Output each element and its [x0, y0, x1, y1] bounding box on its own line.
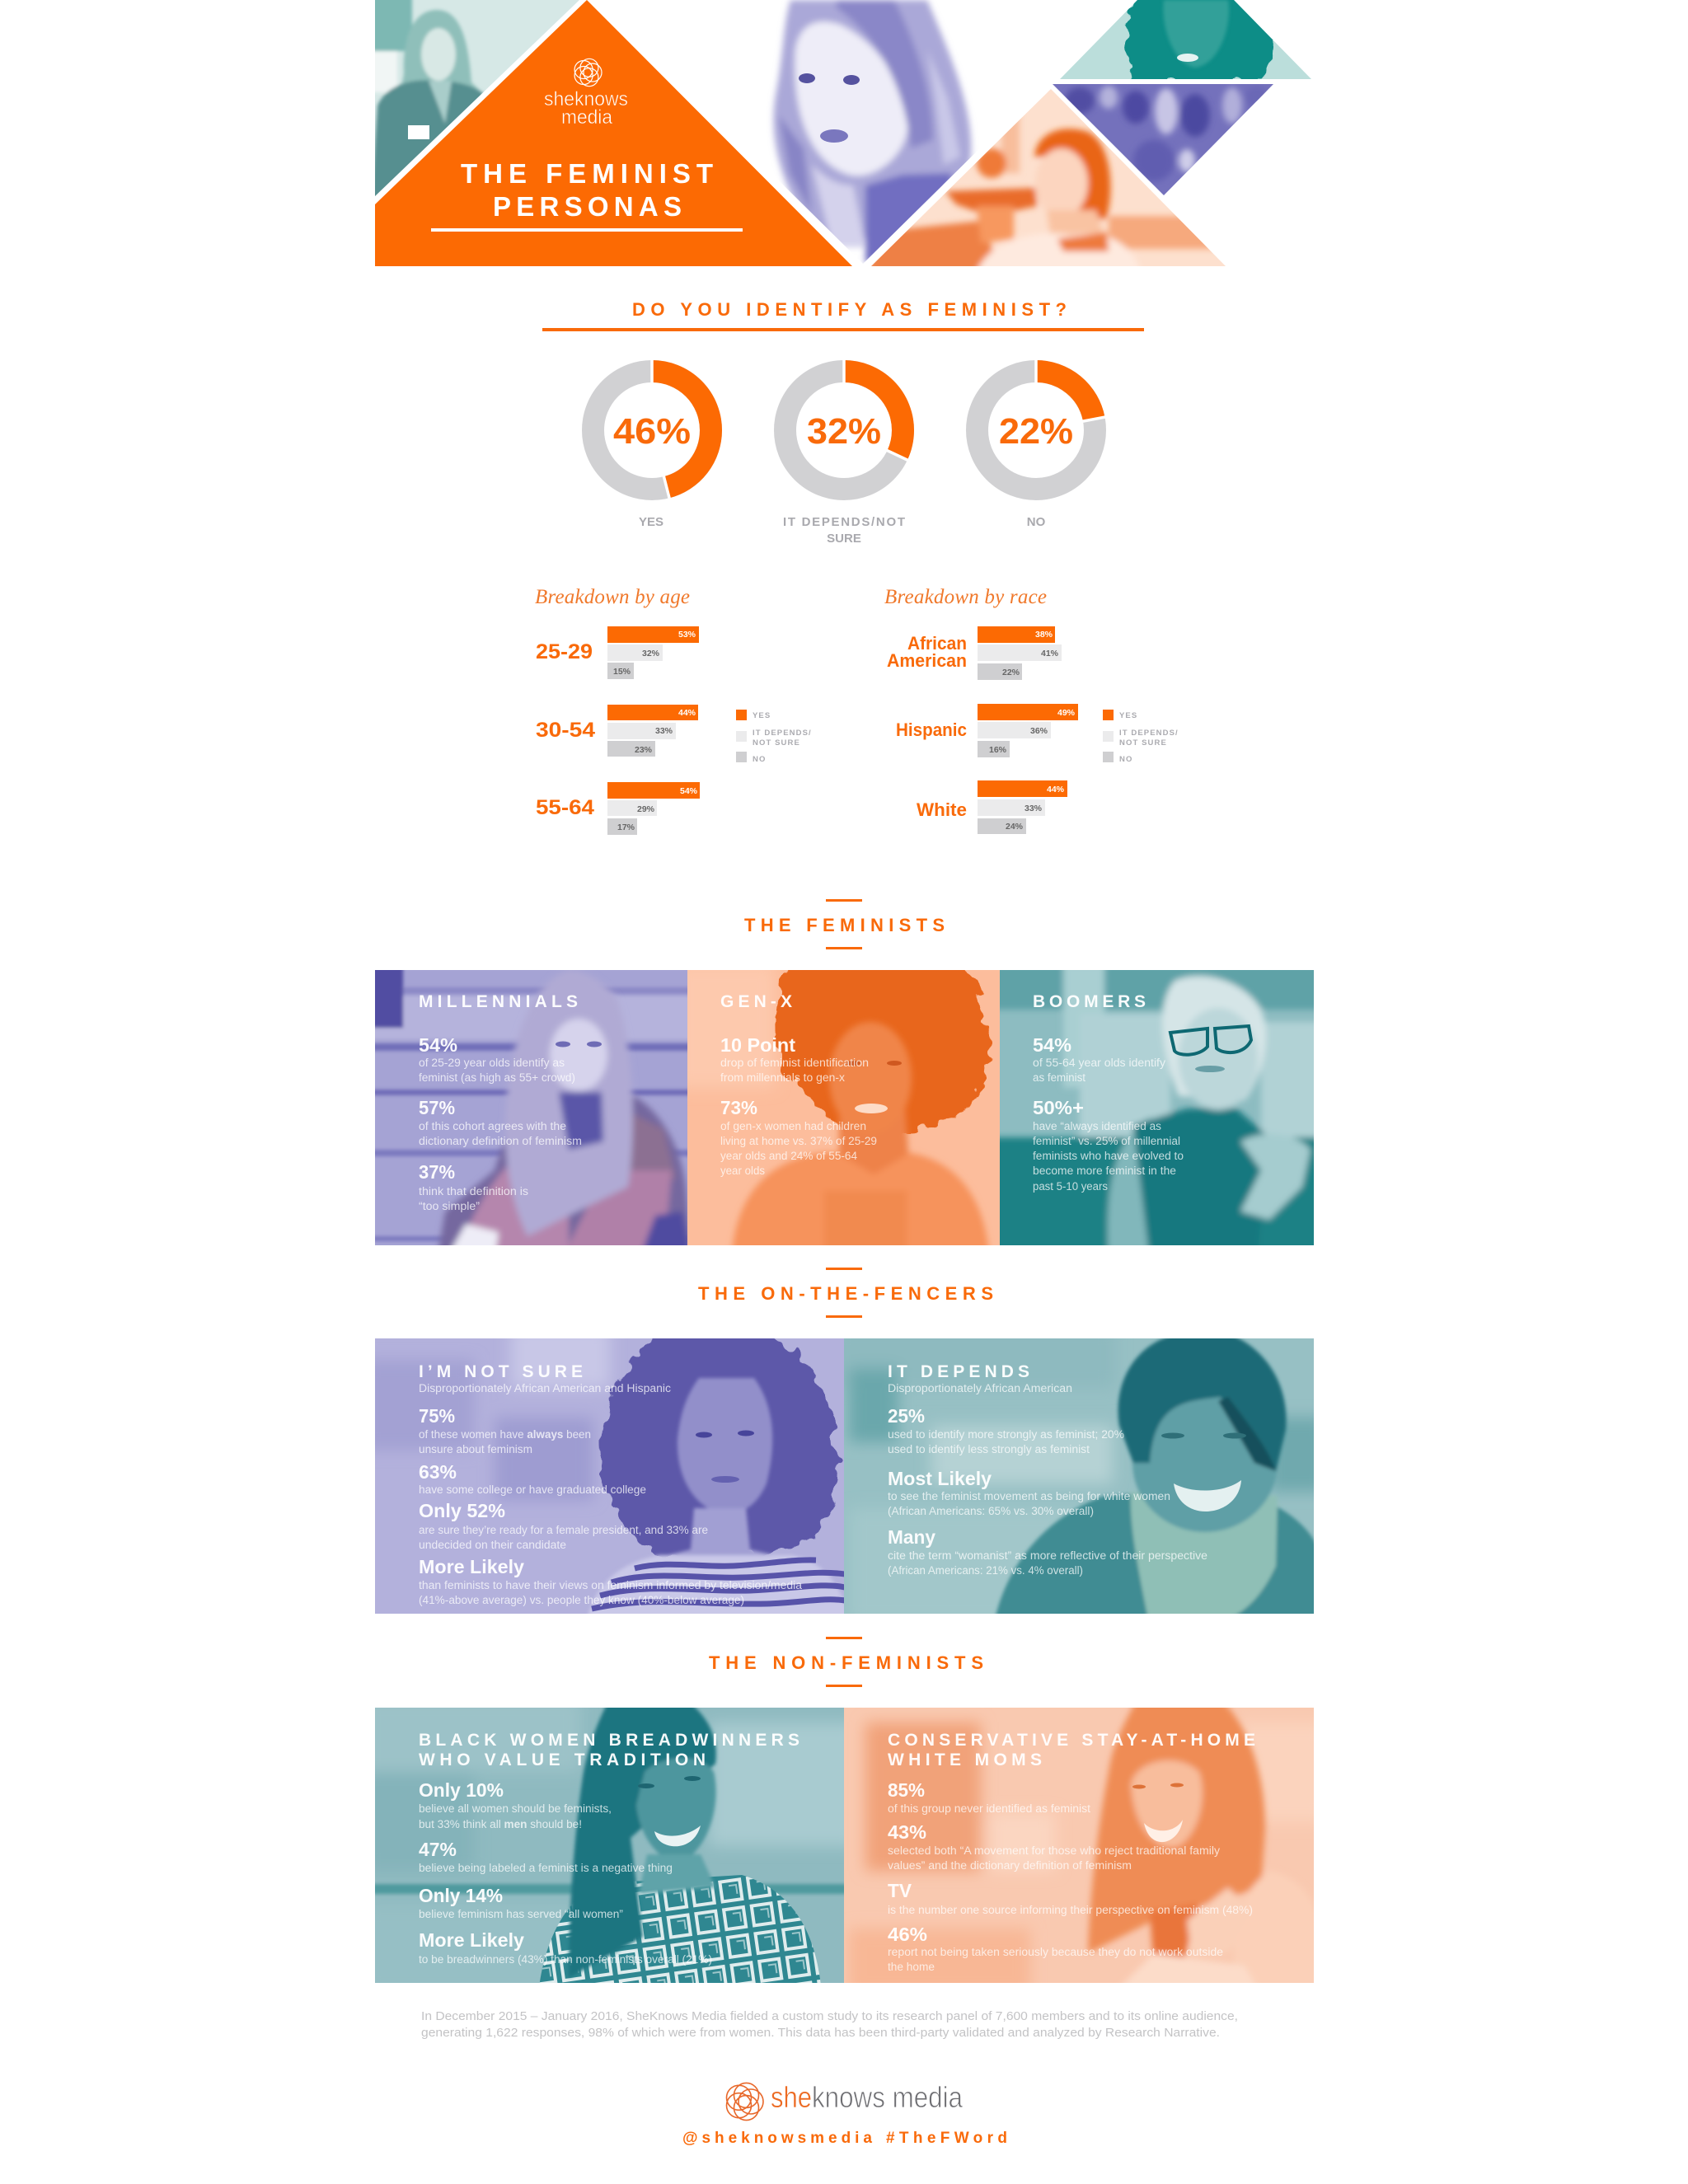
age group 25-29: 25-29: [536, 640, 593, 663]
donut: no 22%: 22%: [999, 411, 1073, 452]
social handles: #TheFWord: [886, 2130, 1007, 2147]
panel: black women breadwinners: [375, 1708, 844, 1983]
race group African American: African: [907, 633, 967, 654]
heading: boomers: BOOMERS: [1033, 992, 1146, 1011]
section heading: do you identify as feminist: DO YOU IDENTIFY AS FEMINIST?: [632, 299, 1067, 320]
stats: black women breadwinners: 47%: [419, 1839, 457, 1860]
age group 30-54: 23%: [635, 745, 653, 755]
footer logo: [727, 2080, 964, 2121]
stats: black women breadwinners: believe being labeled a feminist is a negative thing: [419, 1862, 673, 1874]
race group White: [917, 780, 1067, 834]
stats: gen-x: drop of feminist identification: [720, 1057, 869, 1069]
legend: age: NOT SURE: [753, 738, 800, 748]
stats: black women breadwinners: More Likely: [419, 1929, 524, 1951]
race group Hispanic: 16%: [989, 745, 1007, 755]
title triangle: [375, 0, 852, 266]
age group 30-54: 44%: [678, 708, 696, 718]
stats: gen-x: year olds and 24% of 55-64: [720, 1150, 857, 1162]
stats: it depends: Many: [888, 1526, 935, 1548]
heading: i'm not sure: I’M NOT SURE: [419, 1362, 583, 1381]
panel: conservative stay-at-home white moms: [844, 1698, 1327, 1994]
stats: millennials: [419, 1034, 582, 1212]
age group 25-29: 15%: [613, 667, 631, 677]
stats: conservative stay-at-home white moms: is the number one source informing their perspective on feminism (48%): [888, 1904, 1253, 1916]
race group African American: 41%: [1041, 649, 1059, 658]
donut: no 22%: NO: [1027, 515, 1046, 529]
age group 25-29: [536, 626, 699, 679]
photo triangle: woman portrait (purple): [774, 0, 971, 264]
photo triangle: woman stretching (orange): [865, 82, 1228, 272]
icon: sheknows logo mark: [574, 59, 602, 87]
stats: it depends: cite the term “womanist” as more reflective of their perspective: [888, 1549, 1207, 1562]
legend: race: YES: [1119, 711, 1137, 720]
main title: [461, 158, 713, 222]
stats: it depends: used to identify less strongly as feminist: [888, 1443, 1090, 1455]
legend: race: [1103, 710, 1179, 764]
age group 30-54: 33%: [655, 726, 673, 736]
stats: boomers: feminists who have evolved to: [1033, 1150, 1184, 1162]
heading: gen-x: GEN-X: [720, 992, 792, 1011]
stats: conservative stay-at-home white moms: the home: [888, 1961, 935, 1973]
stats: boomers: have “always identified as: [1033, 1120, 1161, 1132]
age group 55-64: 54%: [680, 786, 698, 796]
age group 30-54: 30-54: [536, 719, 595, 742]
stats: i'm not sure: 63%: [419, 1461, 457, 1483]
photo triangle: smiling woman (teal): [1055, 0, 1315, 82]
social handles: @sheknowsmedia: [682, 2130, 872, 2147]
age group 25-29: 32%: [642, 649, 660, 658]
footnote: methodology: generating 1,622 responses, 98% of which were from women. This data has been third-party validated and analyzed by Research Narrative.: [421, 2027, 1220, 2040]
panel: millennials: [375, 970, 687, 1245]
stats: it depends: (African Americans: 21% vs. 4% overall): [888, 1564, 1083, 1577]
race group African American: [887, 626, 1062, 680]
race group Hispanic: [896, 704, 1078, 757]
footnote: methodology: In December 2015 – January 2016, SheKnows Media fielded a custom study to its research panel of 7,600 members and to its online audience,: [421, 2010, 1238, 2023]
stats: conservative stay-at-home white moms: of this group never identified as feminist: [888, 1802, 1090, 1815]
stats: boomers: as feminist: [1033, 1071, 1085, 1084]
stats: it depends: (African Americans: 65% vs. 30% overall): [888, 1505, 1094, 1517]
stats: it depends: [888, 1405, 1207, 1577]
stats: gen-x: from millennials to gen-x: [720, 1071, 845, 1084]
stats: conservative stay-at-home white moms: values” and the dictionary definition of feminism: [888, 1859, 1132, 1872]
hero banner: [363, 0, 1315, 272]
subheading: Disproportionately African American: [888, 1382, 1072, 1394]
stats: it depends: Most Likely: [888, 1468, 992, 1489]
stats: black women breadwinners: [419, 1779, 712, 1966]
icon: sheknows logo mark: [727, 2083, 763, 2121]
stats: conservative stay-at-home white moms: selected both “A movement for those who reject traditional family: [888, 1844, 1220, 1857]
heading: it depends: IT DEPENDS: [888, 1362, 1029, 1381]
logo wordmark: sheknows: [544, 88, 628, 110]
stats: boomers: 50%+: [1033, 1097, 1084, 1118]
stats: black women breadwinners: believe feminism has served “all women”: [419, 1908, 623, 1920]
photo triangle: woman with name tag (teal): [363, 0, 581, 202]
stats: i'm not sure: are sure they’re ready for a female president, and 33% are: [419, 1524, 708, 1536]
stats: gen-x: 10 Point: [720, 1034, 795, 1056]
donut: yes 46%: 46%: [613, 411, 691, 452]
stats: boomers: of 55-64 year olds identify: [1033, 1057, 1165, 1069]
stats: black women breadwinners: to be breadwinners (43%) than non-feminists overall (21%): [419, 1953, 712, 1966]
stats: millennials: feminist (as high as 55+ crowd): [419, 1071, 575, 1084]
age group 55-64: 17%: [617, 823, 635, 832]
stats: conservative stay-at-home white moms: 43%: [888, 1821, 926, 1843]
panel: i'm not sure: [375, 1338, 844, 1614]
section heading: the non-feminists: THE NON-FEMINISTS: [709, 1652, 983, 1673]
heading: conservative stay-at-home white moms: [888, 1731, 1255, 1769]
stats: gen-x: of gen-x women had children: [720, 1120, 866, 1132]
stats: millennials: think that definition is: [419, 1185, 528, 1197]
heading: black women breadwinners: WHO VALUE TRADITION: [419, 1750, 706, 1769]
age group 55-64: 55-64: [536, 796, 594, 819]
stats: it depends: used to identify more strongly as feminist; 20%: [888, 1428, 1124, 1441]
panel: gen-x: [687, 970, 1000, 1245]
donut: no 22%: [978, 358, 1106, 529]
stats: i'm not sure: [419, 1405, 803, 1606]
stats: i'm not sure: 75%: [419, 1405, 455, 1427]
stats: boomers: feminist” vs. 25% of millennial: [1033, 1135, 1180, 1147]
legend: age: NO: [753, 755, 766, 764]
stats: conservative stay-at-home white moms: [888, 1779, 1253, 1973]
stats: millennials: 37%: [419, 1161, 455, 1183]
heading: millennials: MILLENNIALS: [419, 992, 578, 1011]
age group 25-29: 53%: [678, 630, 696, 640]
stats: conservative stay-at-home white moms: 46%: [888, 1924, 927, 1945]
race group African American: American: [887, 650, 967, 671]
stats: i'm not sure: More Likely: [419, 1556, 524, 1577]
stats: millennials: dictionary definition of feminism: [419, 1135, 582, 1147]
race group White: 24%: [1006, 822, 1024, 832]
stats: gen-x: year olds: [720, 1165, 765, 1177]
stats: i'm not sure: have some college or have graduated college: [419, 1483, 646, 1496]
bar chart: breakdown by race: Breakdown by race: [884, 586, 1047, 608]
main title: THE FEMINIST: [461, 158, 713, 189]
stats: millennials: 54%: [419, 1034, 457, 1056]
donut: yes 46%: YES: [639, 515, 663, 529]
section heading: the feminists: THE FEMINISTS: [744, 915, 945, 935]
donut: yes 46%: [593, 358, 710, 529]
donut: it depends 32%: SURE: [827, 532, 861, 546]
section heading: do you identify as feminist: [542, 299, 1144, 331]
race group Hispanic: 49%: [1057, 708, 1076, 718]
social handles: [682, 2130, 1007, 2147]
stats: i'm not sure: undecided on their candidate: [419, 1539, 566, 1551]
race group White: 33%: [1025, 804, 1043, 813]
stats: it depends: to see the feminist movement as being for white women: [888, 1490, 1170, 1502]
race group White: 44%: [1047, 785, 1065, 794]
section heading: the feminists: [744, 899, 945, 949]
legend: race: IT DEPENDS/: [1119, 729, 1179, 738]
stats: millennials: “too simple”: [419, 1200, 480, 1212]
heading: conservative stay-at-home white moms: WHITE MOMS: [888, 1750, 1042, 1769]
panel: boomers: [1000, 970, 1314, 1245]
stats: millennials: 57%: [419, 1097, 455, 1118]
stats: it depends: 25%: [888, 1405, 925, 1427]
stats: i'm not sure: than feminists to have their views on feminism informed by television/media: [419, 1579, 803, 1591]
age group 30-54: [536, 705, 698, 757]
footer logo: knows media: [812, 2080, 964, 2114]
stats: boomers: [1033, 1034, 1184, 1193]
stats: boomers: 54%: [1033, 1034, 1071, 1056]
subheading: Disproportionately African American and Hispanic: [419, 1382, 671, 1394]
donut charts: [593, 358, 1106, 546]
section heading: the on-the-fencers: [698, 1268, 993, 1318]
stats: black women breadwinners: believe all women should be feminists,: [419, 1802, 612, 1815]
stats: i'm not sure: Only 52%: [419, 1500, 505, 1521]
race group White: White: [917, 799, 967, 820]
stats: black women breadwinners: but 33% think all men should be!: [419, 1818, 582, 1830]
stats: boomers: past 5-10 years: [1033, 1180, 1108, 1193]
footer logo: she: [771, 2080, 812, 2114]
donut: it depends 32%: [783, 358, 909, 546]
stats: i'm not sure: (41%-above average) vs. people they know (40%-below average): [419, 1594, 744, 1606]
stats: conservative stay-at-home white moms: TV: [888, 1880, 912, 1901]
heading: black women breadwinners: BLACK WOMEN BREADWINNERS: [419, 1731, 799, 1750]
bar chart: breakdown by race: [884, 586, 1179, 834]
logo wordmark: media: [561, 106, 613, 129]
legend: age: YES: [753, 711, 771, 720]
stats: gen-x: living at home vs. 37% of 25-29: [720, 1135, 877, 1147]
stats: i'm not sure: unsure about feminism: [419, 1443, 532, 1455]
bar chart: breakdown by age: [535, 586, 812, 835]
bar chart: breakdown by age: Breakdown by age: [535, 586, 690, 608]
donut: it depends 32%: 32%: [807, 411, 881, 452]
stats: black women breadwinners: Only 10%: [419, 1779, 504, 1801]
race group Hispanic: Hispanic: [896, 719, 967, 740]
stats: gen-x: 73%: [720, 1097, 757, 1118]
stats: conservative stay-at-home white moms: report not being taken seriously because they do not work outside: [888, 1946, 1223, 1958]
section heading: the non-feminists: [709, 1637, 983, 1687]
legend: age: [736, 710, 812, 764]
race group African American: 38%: [1035, 630, 1053, 640]
legend: age: IT DEPENDS/: [753, 729, 812, 738]
donut: it depends 32%: IT DEPENDS/NOT: [783, 515, 905, 529]
panel: it depends: [844, 1338, 1314, 1614]
stats: gen-x: [720, 1034, 877, 1177]
stats: millennials: of 25-29 year olds identify as: [419, 1057, 565, 1069]
photo triangle: crowd (purple): [1051, 82, 1275, 198]
stats: conservative stay-at-home white moms: 85%: [888, 1779, 925, 1801]
footnote: methodology: [421, 2010, 1238, 2040]
stats: black women breadwinners: Only 14%: [419, 1885, 503, 1906]
section heading: the on-the-fencers: THE ON-THE-FENCERS: [698, 1283, 993, 1304]
age group 55-64: [536, 782, 700, 835]
legend: race: NOT SURE: [1119, 738, 1167, 748]
legend: race: NO: [1119, 755, 1132, 764]
race group Hispanic: 36%: [1030, 726, 1048, 736]
stats: boomers: become more feminist in the: [1033, 1165, 1176, 1177]
stats: i'm not sure: of these women have always been: [419, 1428, 591, 1441]
race group African American: 22%: [1002, 668, 1020, 677]
heading: black women breadwinners: [419, 1731, 799, 1769]
stats: millennials: of this cohort agrees with the: [419, 1120, 566, 1132]
heading: conservative stay-at-home white moms: CONSERVATIVE STAY-AT-HOME: [888, 1731, 1255, 1750]
age group 55-64: 29%: [637, 804, 655, 814]
logo wordmark: [544, 88, 628, 129]
main title: PERSONAS: [493, 191, 682, 222]
